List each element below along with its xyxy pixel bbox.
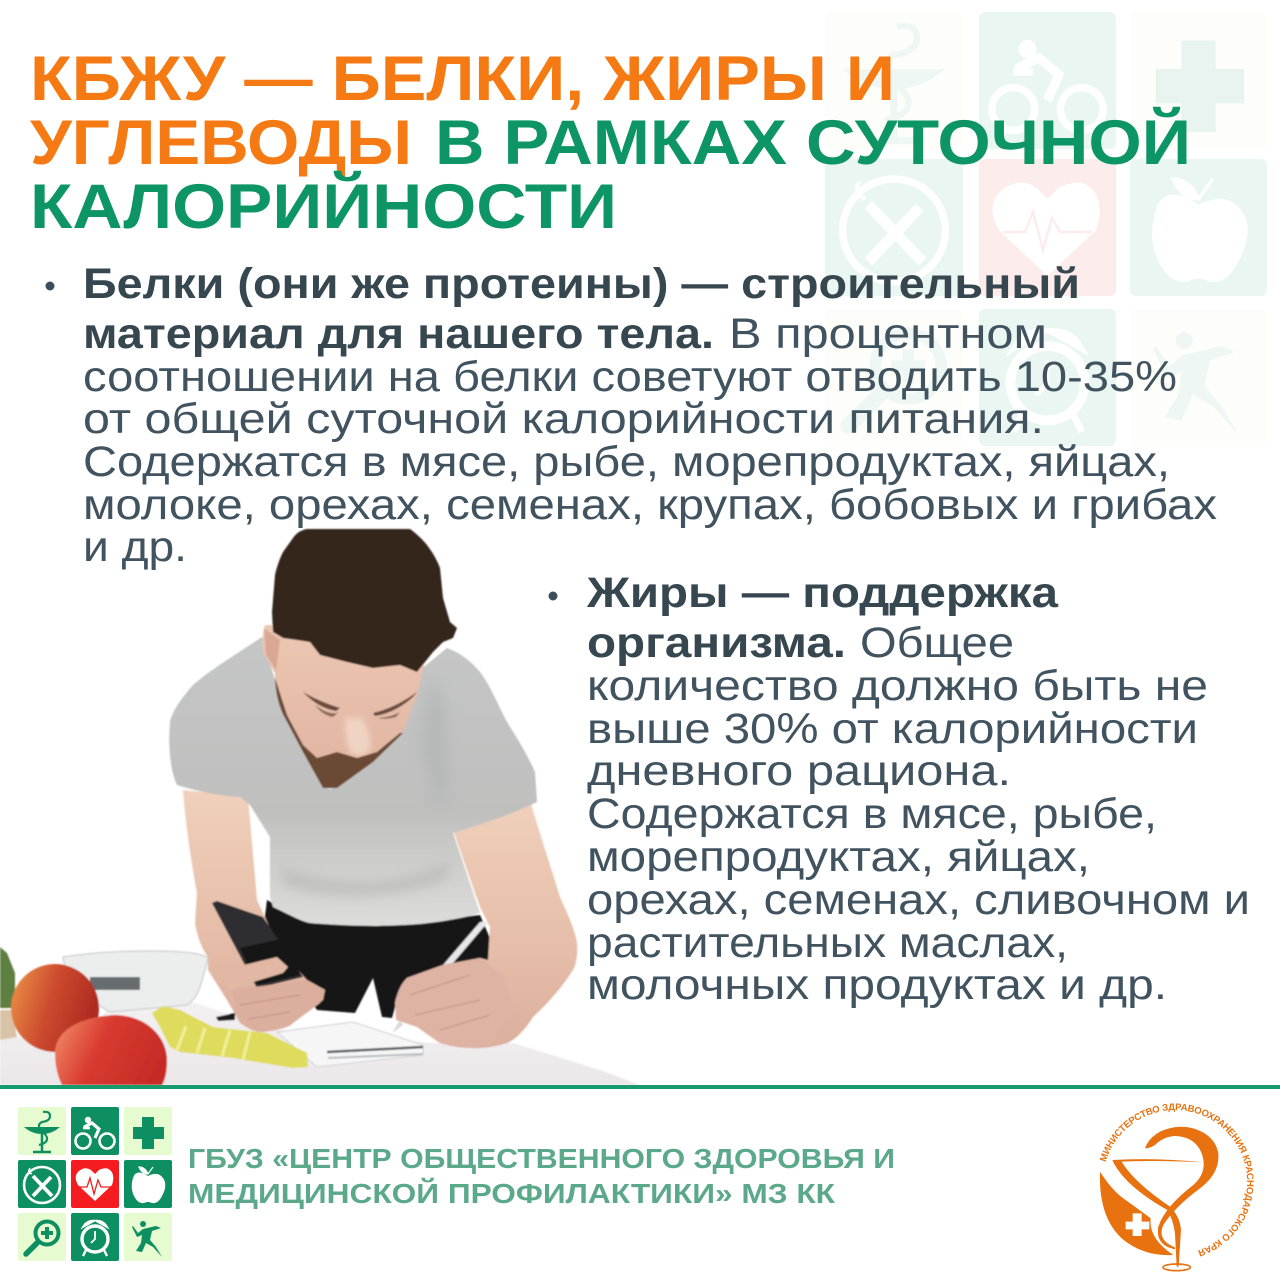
text block: proteins: от общей суточной калорийности питания. [83, 395, 1044, 443]
green divider line [0, 1085, 1280, 1089]
pen [392, 922, 488, 1033]
footer organisation name: ГБУЗ «ЦЕНТР ОБЩЕСТВЕННОГО ЗДОРОВЬЯ И [188, 1143, 895, 1174]
title: В РАМКАХ СУТОЧНОЙ [435, 107, 1191, 178]
footer organisation name: МЕДИЦИНСКОЙ ПРОФИЛАКТИКИ» МЗ КК [188, 1177, 836, 1209]
glass bowl [63, 951, 208, 1012]
text block: fats: растительных маслах, [587, 919, 1068, 967]
writing hand [395, 958, 515, 1048]
text block: fats: выше 30% от калорийности [587, 705, 1198, 753]
text block: fats: морепродуктах, яйцах, [587, 833, 1090, 881]
trousers [262, 900, 492, 1018]
phone [212, 901, 303, 988]
footer logo: icon grid [18, 1107, 172, 1261]
text block: fats: количество должно быть не [587, 662, 1208, 710]
measuring tape [152, 1006, 308, 1068]
text block: fats: Общее [860, 619, 1014, 667]
small black pen on table [216, 1013, 235, 1021]
front apple [55, 1015, 167, 1085]
footer organisation name [188, 1143, 895, 1209]
text block: fats: молочных продуктах и др. [587, 961, 1167, 1009]
text block: proteins: Содержатся в мясе, рыбе, морепродуктах, яйцах, [83, 438, 1170, 486]
lettuce and board [0, 947, 17, 1040]
illustration: man at table with food [0, 529, 640, 1085]
hair [272, 529, 457, 672]
left arm [183, 790, 325, 1032]
text block: proteins: материал для нашего тела. [83, 310, 714, 358]
text block: fats: организма. [587, 619, 846, 667]
watermark icon grid [825, 12, 1267, 446]
title: УГЛЕВОДЫ [30, 108, 412, 178]
text block: fats: Содержатся в мясе, рыбе, [587, 790, 1157, 838]
title: КАЛОРИЙНОСТИ [30, 171, 617, 242]
title: КБЖУ — БЕЛКИ, ЖИРЫ И [30, 44, 895, 114]
beard [275, 678, 403, 788]
table [0, 1002, 640, 1085]
text block: fats [548, 569, 1250, 1009]
back apple [11, 964, 99, 1052]
text block: proteins: и др. [83, 523, 187, 571]
text block: fats: Жиры — поддержка [586, 569, 1059, 617]
text block: proteins [46, 260, 1218, 571]
title [30, 44, 1191, 242]
text block: fats: дневного рациона. [587, 747, 1011, 795]
ministry logo: МИНИСТЕРСТВО ЗДРАВООХРАНЕНИЯ КРАСНОДАРСКОГО КРАЯ [1100, 1104, 1254, 1256]
text block: proteins: В процентном [729, 310, 1047, 358]
face [262, 625, 424, 788]
text block: proteins: соотношении на белки советуют отводить 10-35% [83, 353, 1177, 401]
right arm [395, 800, 577, 1048]
text block: proteins: Белки (они же протеины) — строительный [83, 260, 1080, 308]
text block: fats: орехах, семенах, сливочном и [587, 876, 1250, 924]
grey t-shirt [169, 637, 537, 926]
thumb and fingers [223, 957, 325, 1032]
notebook [277, 1022, 423, 1067]
text block: proteins: молоке, орехах, семенах, крупах, бобовых и грибах [83, 481, 1218, 529]
